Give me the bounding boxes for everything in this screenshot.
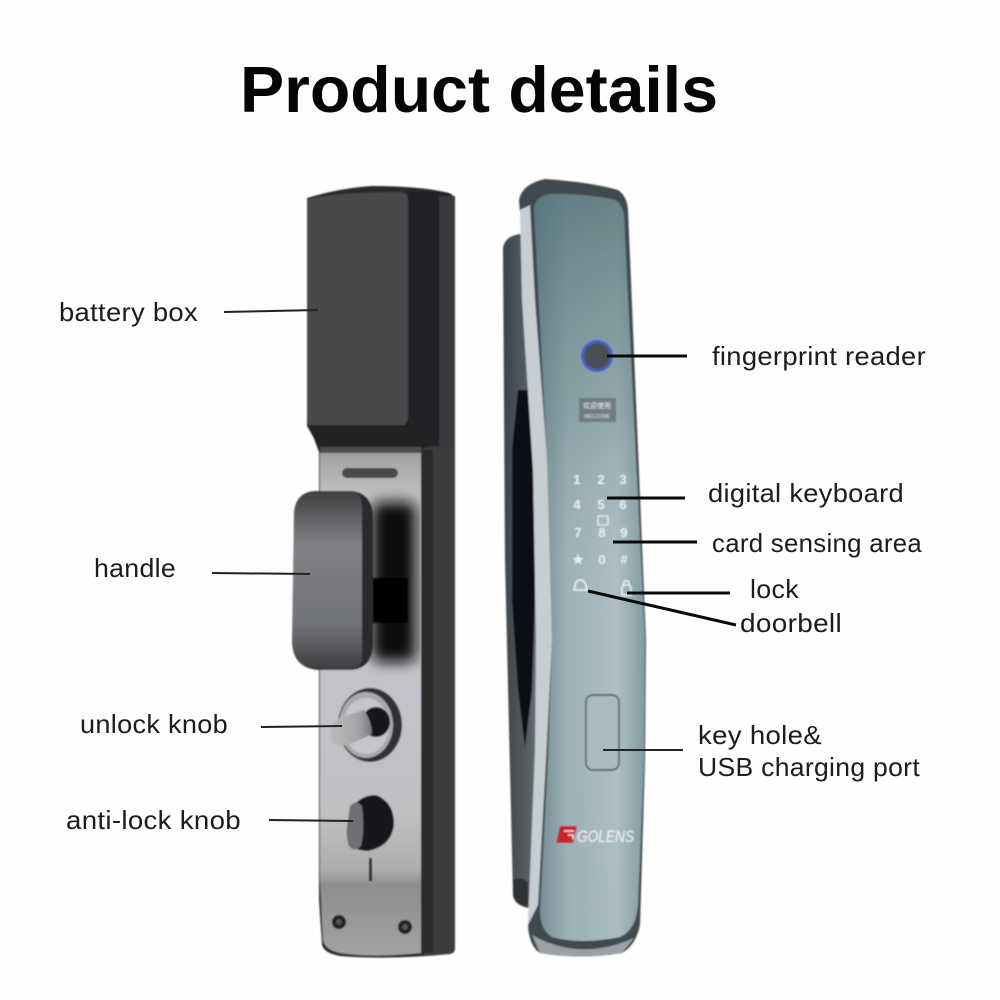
display	[579, 398, 616, 422]
label: key hole and USB charging port: key hole&	[698, 720, 822, 750]
back handle recess	[512, 390, 535, 747]
label: doorbell	[588, 591, 842, 638]
keypad: 8	[598, 525, 606, 540]
front face	[534, 194, 645, 941]
silver edge strip	[520, 205, 552, 925]
keypad	[572, 472, 631, 595]
metal plate	[320, 450, 421, 956]
keypad: 5	[597, 497, 605, 512]
keypad: 0	[598, 552, 606, 567]
logo	[556, 826, 635, 846]
fingerprint sensor	[581, 340, 613, 372]
front lock panel	[503, 179, 646, 956]
keypad: 6	[619, 497, 627, 512]
keypad: 1	[573, 472, 581, 487]
handle base shadow	[372, 502, 416, 662]
unlock knob	[330, 688, 402, 762]
index mark	[369, 858, 372, 881]
label: lock: lock	[750, 574, 800, 604]
label: digital keyboard: digital keyboard	[708, 478, 904, 508]
screws	[332, 915, 346, 929]
label: doorbell: doorbell	[740, 608, 842, 638]
title: Product details	[240, 53, 718, 126]
back handle	[503, 234, 550, 908]
keypad: 9	[620, 525, 628, 540]
keypad: 2	[597, 472, 605, 487]
logo: GOLENS	[577, 827, 635, 846]
keypad: #	[620, 552, 628, 567]
icon: bell	[574, 580, 587, 590]
icon: padlock	[622, 580, 631, 595]
handle side	[340, 491, 373, 670]
label: unlock knob: unlock knob	[80, 709, 228, 739]
keypad: 4	[573, 497, 581, 512]
battery box	[307, 192, 408, 425]
bottom lip	[532, 935, 634, 956]
rear lock panel	[292, 186, 455, 958]
handle front	[292, 491, 362, 670]
keypad: 7	[574, 525, 582, 540]
rear panel body	[307, 186, 455, 958]
keypad: 3	[619, 472, 627, 487]
key hole cover	[586, 695, 619, 770]
outer bezel	[519, 179, 646, 956]
sensor slot	[342, 468, 398, 478]
anti-lock knob	[347, 795, 394, 851]
display: WELCOME	[584, 414, 611, 420]
battery box side	[408, 191, 449, 445]
label: key hole and USB charging port	[603, 720, 920, 782]
side band	[421, 447, 455, 955]
display: 欢迎使用	[583, 401, 611, 410]
keypad: ★	[572, 552, 584, 567]
label: handle: handle	[94, 553, 176, 583]
label: card sensing area: card sensing area	[712, 528, 922, 558]
battery box shadow collar	[309, 420, 430, 452]
label: anti-lock knob: anti-lock knob	[66, 805, 241, 835]
label: battery box: battery box	[59, 297, 198, 327]
label: fingerprint reader: fingerprint reader	[712, 341, 926, 371]
label: key hole and USB charging port: USB charging port	[698, 752, 920, 782]
